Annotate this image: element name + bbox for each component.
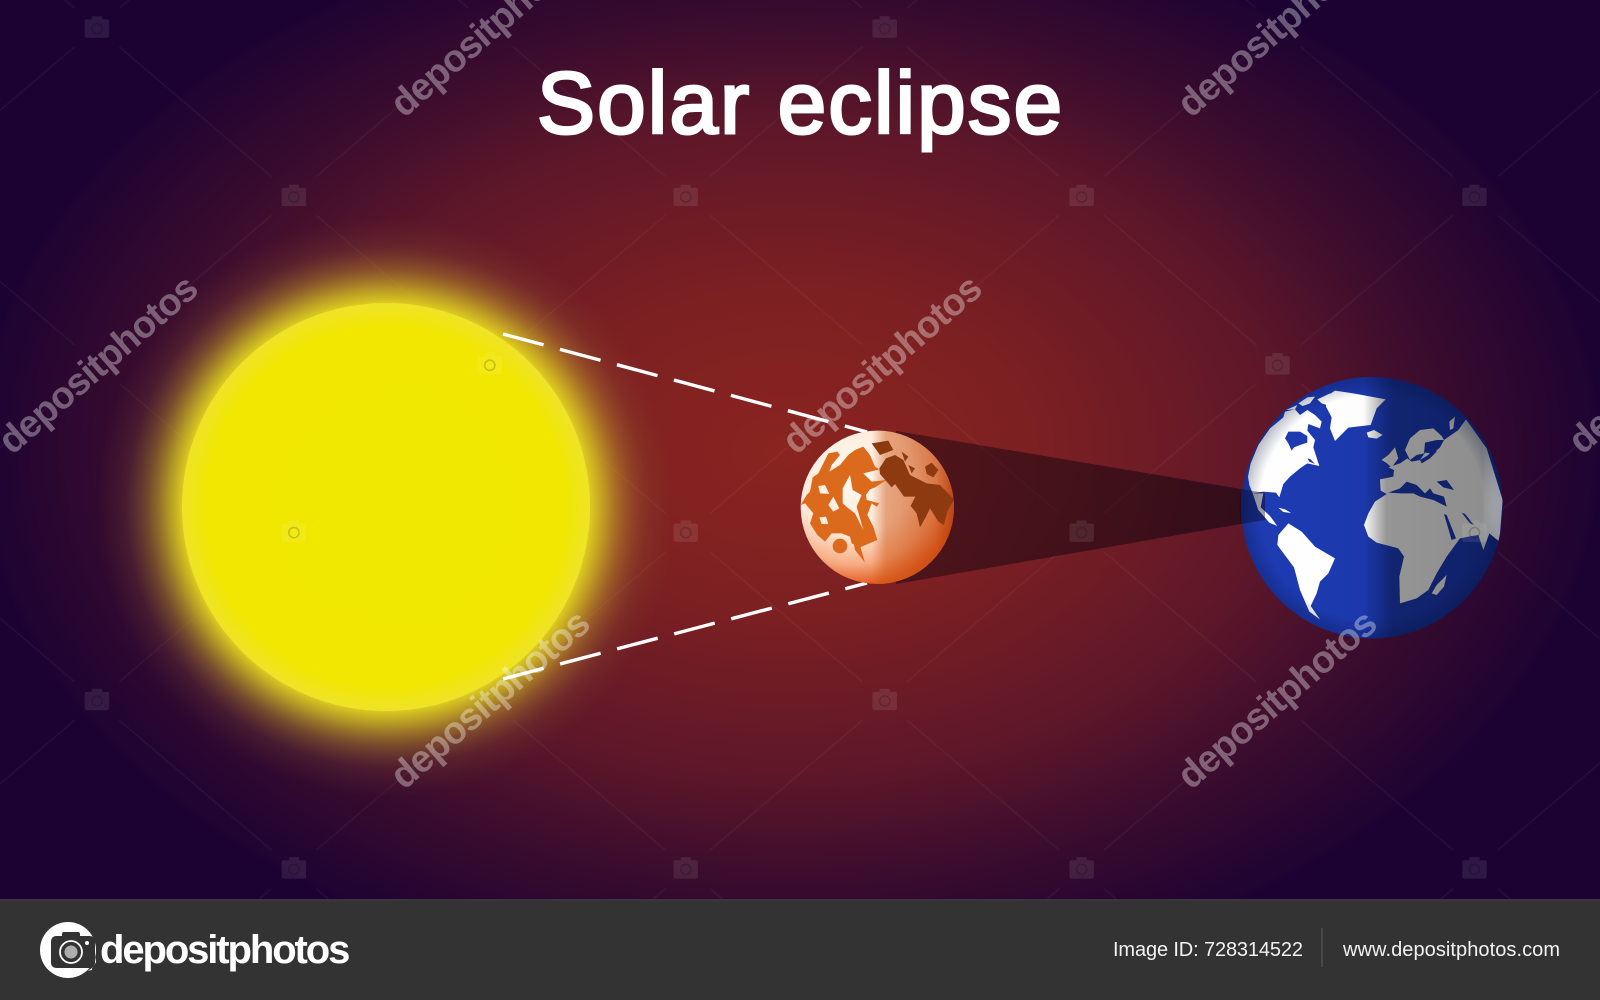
watermark camera icons [85,16,1487,879]
mexico and central america [1253,493,1277,526]
south america [1277,523,1335,619]
british isles [1382,447,1398,467]
eurasia and africa [1364,419,1503,603]
footer image id: Image ID: 728314522 [1113,939,1303,961]
watermarks: depositphotos [774,267,990,462]
moon maria: shaded side [872,441,954,527]
scandinavia [1405,428,1444,460]
footer logo icon [40,922,96,978]
dashed tangent line: bottom [503,583,867,679]
moon maria: lit side [801,447,887,547]
mediterranean, black sea, red sea, persian gulf [1388,448,1474,540]
dashed tangent line: top [503,334,867,432]
iceland [1367,430,1383,439]
greenland [1326,391,1386,441]
watermarks: depositphotos [382,602,598,797]
hudson bay and great lakes [1285,432,1315,464]
footer divider [1321,928,1323,967]
moon [801,430,958,587]
north america [1248,409,1322,497]
arctic island east [1449,417,1455,430]
earth [1241,377,1503,638]
watermarks: depositphotos [1169,602,1385,797]
madagascar [1432,575,1447,595]
footer logo wordmark: depositphotos [100,928,349,972]
moon shaded half [872,430,958,587]
arctic islands [1286,393,1335,410]
cuba and antilles [1278,508,1291,513]
footer bar [0,899,1600,1000]
moon crater and ray [833,539,865,563]
shadow falling on earth [1240,489,1265,524]
shadow cone from moon to earth [896,431,1241,584]
sun [96,217,676,797]
watermarks [0,0,1600,797]
footer url: www.depositphotos.com [1342,939,1560,961]
title: Solar eclipse [537,55,1062,152]
